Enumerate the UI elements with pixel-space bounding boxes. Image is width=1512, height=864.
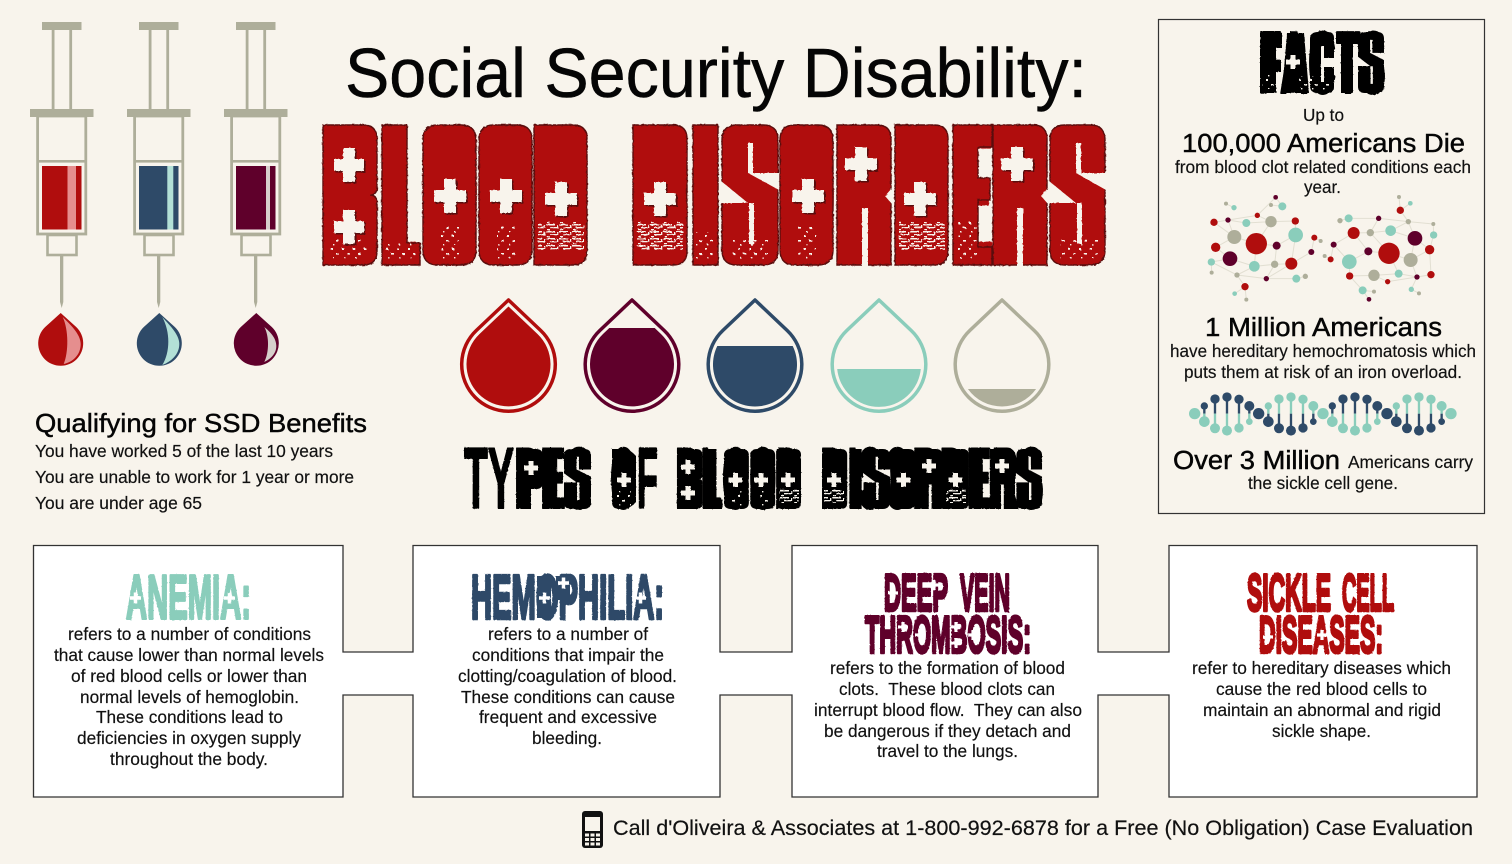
- distressed patches: [779, 489, 799, 503]
- card: anemia: These conditions lead to: [96, 707, 283, 727]
- fact: blood clots: 100,000 Americans Die: [1182, 130, 1465, 158]
- icon: navy syringe: [127, 22, 190, 366]
- heading: types of blood disorders: [464, 431, 1044, 527]
- card: anemia: refers to a number of conditions: [68, 624, 311, 644]
- heading: deep vein thrombosis: DEEP: [884, 564, 948, 622]
- card: hemophilia: conditions that impair the: [472, 645, 664, 665]
- letter slits: [721, 143, 1106, 266]
- fact: hemochromatosis: have hereditary hemochromatosis which: [1170, 341, 1476, 361]
- heading: blood disorders stencil: [319, 84, 1108, 307]
- heading: deep vein thrombosis: VEIN: [960, 564, 1010, 622]
- heading: blood disorders stencil: I: [685, 84, 725, 307]
- crosses: [336, 148, 1034, 246]
- card: sickle cell diseases: CELL: [1342, 564, 1394, 622]
- heading: blood disorders stencil: D: [529, 84, 589, 307]
- heading: hemophilia: [471, 564, 664, 632]
- card: deep vein thrombosis: THROMBOSIS:: [865, 606, 1031, 664]
- fact: sickle cell: Americans carry: [1348, 452, 1473, 472]
- panel: facts: [1158, 13, 1484, 514]
- card: hemophilia: frequent and excessive: [479, 707, 657, 727]
- heading: blood disorders stencil: R: [988, 84, 1048, 307]
- heading: blood disorders stencil: E: [949, 84, 995, 307]
- icon: maroon drop: [585, 300, 679, 411]
- card: deep vein thrombosis: be dangerous if they detach and: [824, 721, 1071, 741]
- text block: qualifying for SSD benefits: You are unable to work for 1 year or more: [35, 467, 354, 487]
- card: sickle cell diseases: cause the red blood cells to: [1216, 679, 1427, 699]
- card: hemophilia: refers to a number of: [488, 624, 648, 644]
- card: hemophilia: clotting/coagulation of blood.: [458, 666, 677, 686]
- title: Social Security Disability:: [345, 34, 1087, 112]
- card: anemia: deficiencies in oxygen supply: [77, 728, 301, 748]
- fact: hemochromatosis: 1 Million Americans: [1205, 314, 1442, 342]
- card: deep vein thrombosis: refers to the formation of blood: [830, 658, 1065, 678]
- heading: sickle cell diseases: SICKLE: [1247, 564, 1331, 622]
- heading: types of blood disorders: BLOOD: [675, 431, 802, 527]
- letter blocks: [323, 125, 587, 265]
- card: anemia: that cause lower than normal levels: [54, 645, 324, 665]
- card: anemia: normal levels of hemoglobin.: [80, 687, 299, 707]
- fact: blood clots: Up to: [1303, 105, 1344, 125]
- fact: sickle cell: the sickle cell gene.: [1248, 473, 1398, 493]
- heading: blood disorders stencil: O: [422, 84, 480, 307]
- card: sickle cell diseases: maintain an abnormal and rigid: [1203, 700, 1441, 720]
- card: sickle cell diseases: [1192, 564, 1451, 741]
- panel: connected disorder cards: [34, 546, 1477, 797]
- text block: qualifying for SSD benefits: You are under age 65: [35, 493, 202, 513]
- card: deep vein thrombosis: clots. These blood clots can: [839, 679, 1055, 699]
- fact: sickle cell: [1173, 447, 1473, 493]
- heading: blood disorders stencil: L: [378, 84, 418, 307]
- fact: blood clots: year.: [1304, 177, 1341, 197]
- text: S: [1048, 84, 1108, 307]
- call to action: Call d'Oliveira & Associates at 1-800-992-6878 for a Free (No Obligation) Case Evaluation: [613, 816, 1473, 840]
- heading: blood disorders stencil: O: [478, 84, 536, 307]
- card: anemia: ANEMIA:: [126, 564, 251, 632]
- card: hemophilia: These conditions can cause: [461, 687, 675, 707]
- card: sickle cell diseases: refer to hereditary diseases which: [1192, 658, 1451, 678]
- icon: DNA strand: [1189, 392, 1457, 436]
- heading: blood disorders stencil: S: [720, 84, 780, 307]
- card: anemia: throughout the body.: [110, 749, 268, 769]
- icon: grey drop: [955, 300, 1049, 411]
- text block: qualifying for SSD benefits: Qualifying for SSD Benefits: [35, 408, 367, 438]
- icon: molecule clusters: [1208, 195, 1437, 302]
- heading: facts: [1258, 13, 1386, 112]
- card: anemia: [54, 564, 324, 769]
- heading: anemia: [126, 564, 251, 632]
- letter blocks: [518, 449, 636, 509]
- heading: blood disorders stencil: O: [779, 84, 837, 307]
- text block: qualifying for SSD benefits: [35, 408, 367, 513]
- heading: blood disorders stencil: B: [319, 84, 381, 307]
- card: deep vein thrombosis: interrupt blood flow. They can also: [814, 700, 1082, 720]
- heading: deep vein thrombosis: [865, 564, 1031, 664]
- icon: teal drop: [832, 300, 926, 411]
- icon: phone: [582, 811, 603, 848]
- heading: types of blood disorders: TYPES: [464, 431, 592, 527]
- icon: navy drop: [708, 300, 802, 411]
- heading: sickle cell diseases: [1247, 564, 1394, 664]
- text block: qualifying for SSD benefits: You have worked 5 of the last 10 years: [35, 441, 333, 461]
- letter blocks: [1260, 32, 1358, 93]
- fact: blood clots: from blood clot related conditions each: [1175, 157, 1471, 177]
- text: DISORDERS: [820, 431, 1044, 527]
- fact: hemochromatosis: puts them at risk of an iron overload.: [1184, 362, 1462, 382]
- icon: red syringe: [30, 22, 94, 366]
- icon: full red drop: [462, 300, 555, 411]
- crosses: [524, 459, 1009, 500]
- card: hemophilia: [458, 564, 677, 748]
- heading: blood disorders stencil: D: [890, 84, 950, 307]
- heading: blood disorders stencil: R: [832, 84, 892, 307]
- icon: maroon syringe: [224, 22, 288, 366]
- heading: blood disorders stencil: D: [628, 84, 688, 307]
- distressed patches: [538, 222, 584, 250]
- card: hemophilia: bleeding.: [532, 728, 602, 748]
- card: anemia: of red blood cells or lower than: [71, 666, 307, 686]
- heading: types of blood disorders: OF: [610, 431, 658, 527]
- card: deep vein thrombosis: travel to the lungs.: [877, 741, 1018, 761]
- card: sickle cell diseases: sickle shape.: [1272, 721, 1371, 741]
- fact: blood clots: [1175, 105, 1471, 197]
- card: hemophilia: HEMOPHILIA:: [471, 564, 664, 632]
- fact: hemochromatosis: [1170, 314, 1476, 382]
- card: deep vein thrombosis: [814, 564, 1082, 761]
- fact: sickle cell: Over 3 Million: [1173, 447, 1340, 475]
